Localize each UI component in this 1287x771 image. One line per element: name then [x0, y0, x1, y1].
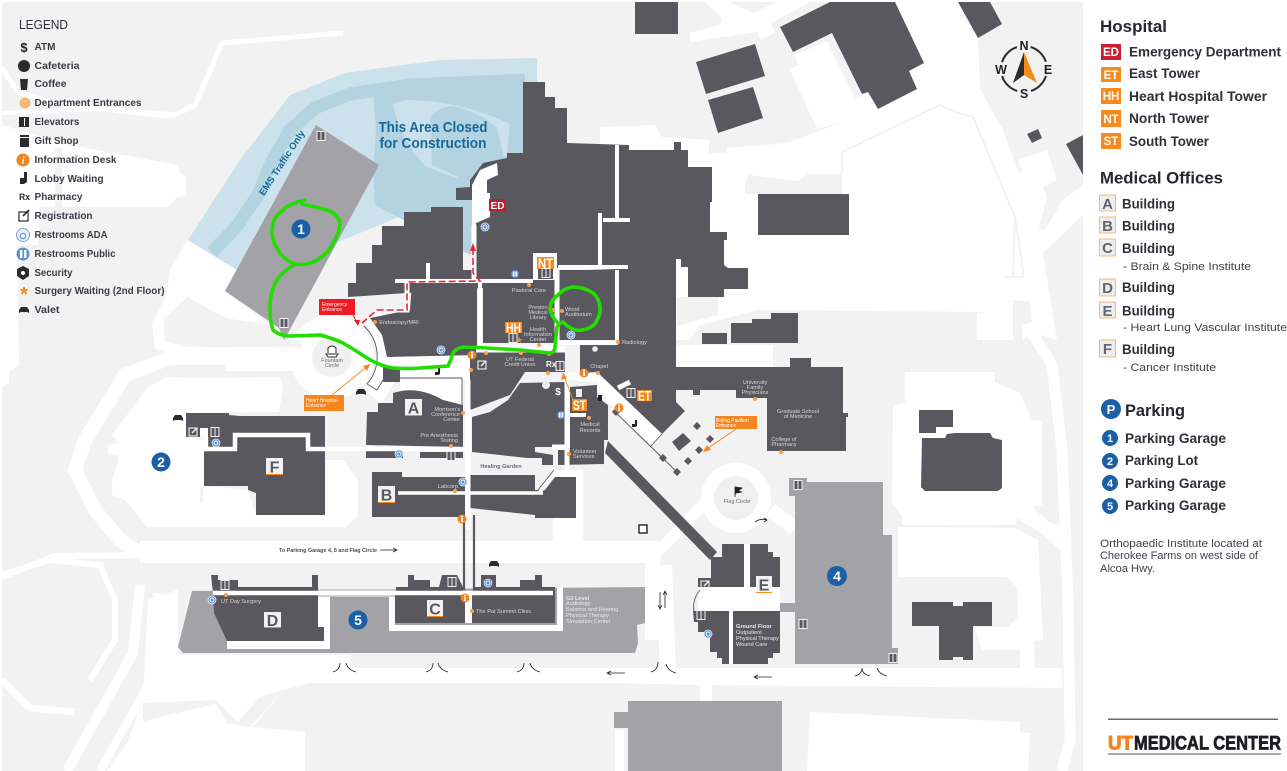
- ground floor note: Outpatient: [736, 630, 762, 636]
- garage 4: [780, 478, 898, 664]
- key: building f: [1100, 340, 1216, 374]
- entrance arrows: [332, 315, 736, 452]
- building letters: B: [381, 488, 392, 504]
- flag circle: Flag Circle: [724, 499, 750, 505]
- legend: elevators: Elevators: [34, 117, 80, 128]
- legend: atm: $: [20, 40, 28, 55]
- ground floor note: Physical Therapy: [736, 636, 779, 642]
- key: parking 4: Parking Garage: [1125, 476, 1226, 491]
- number markers: 1: [297, 221, 305, 237]
- key: building a: [1100, 195, 1175, 213]
- key: building e: [1100, 302, 1287, 334]
- middle block: [483, 283, 557, 343]
- key: building e: - Heart Lung Vascular Institute: [1123, 322, 1287, 334]
- key: heart hospital tower: Heart Hospital Tower: [1129, 89, 1268, 104]
- white bands around decks: [227, 587, 560, 643]
- building B: [372, 472, 465, 517]
- key: north tower: NT: [1103, 114, 1119, 126]
- entrance tags: Entrance: [322, 307, 342, 313]
- rx: Rx: [546, 360, 557, 369]
- registration: [189, 361, 709, 589]
- entrance tags: [304, 299, 757, 429]
- key: building e: E: [1102, 303, 1113, 320]
- compass: W: [995, 63, 1007, 77]
- legend title: LEGEND: [19, 18, 68, 32]
- key: building d: Building: [1122, 280, 1175, 295]
- ground floor note: [736, 624, 779, 648]
- tower badges: ST: [573, 398, 587, 413]
- legend: restrooms ada: Restrooms ADA: [34, 230, 108, 241]
- parking heading: P: [1107, 402, 1116, 417]
- key: parking 1: Parking Garage: [1125, 431, 1226, 446]
- entrance tags: Entrance: [716, 423, 736, 429]
- department entrance dots: [224, 283, 783, 613]
- map labels: Medical: [528, 310, 548, 316]
- key: building c: C: [1102, 240, 1113, 257]
- map labels: Preston: [528, 305, 548, 311]
- key: south tower: [1101, 133, 1210, 149]
- key: building f: F: [1103, 341, 1112, 358]
- tower badges: [489, 199, 652, 413]
- legend: coffee: [20, 79, 67, 90]
- building F: [186, 413, 325, 515]
- map labels: Records: [580, 428, 601, 434]
- key: east tower: [1101, 66, 1201, 82]
- visitor route in green: [270, 200, 600, 368]
- key: east tower: ET: [1104, 70, 1118, 82]
- legend: surgery waiting: Surgery Waiting (2nd Floor): [34, 286, 164, 297]
- heading: area closed: [378, 119, 488, 152]
- atm: $: [555, 387, 561, 398]
- map labels: Healing Garden: [480, 464, 522, 470]
- legend: information desk: [16, 154, 117, 167]
- emergency route: [362, 243, 480, 323]
- map labels: Library: [529, 315, 547, 321]
- building C: [396, 575, 463, 595]
- tower badges: HH: [506, 320, 521, 336]
- grey patches over open ground: [55, 105, 1023, 727]
- number markers: [152, 220, 847, 630]
- key: north tower: North Tower: [1129, 111, 1210, 126]
- key: building a: A: [1102, 196, 1113, 213]
- orthopaedic note: Orthopaedic Institute located at: [1100, 538, 1262, 550]
- key: building d: [1100, 279, 1175, 297]
- key: parking 2: Parking Lot: [1125, 453, 1198, 468]
- map labels: Pre Anesthesia: [420, 433, 459, 439]
- ems label: EMS Traffic Only: [257, 128, 308, 198]
- orthopaedic note: Cherokee Farms on west side of: [1100, 550, 1259, 562]
- key: building b: Building: [1122, 218, 1175, 234]
- number markers: 2: [157, 454, 165, 470]
- flag circle: [714, 476, 758, 520]
- map labels: Credit Union: [504, 362, 536, 368]
- key: building f: - Cancer Institute: [1123, 362, 1216, 374]
- g2 level note: Audiology: [566, 601, 591, 607]
- legend: gift shop: Gift Shop: [34, 136, 78, 147]
- key: building f: Building: [1122, 342, 1175, 357]
- elevators: [210, 131, 898, 663]
- map labels: University: [743, 380, 767, 386]
- ground floor note: Wound Care: [736, 642, 767, 648]
- key: building a: Building: [1122, 196, 1175, 212]
- building E: [698, 544, 744, 590]
- building letters: C: [429, 602, 441, 618]
- direction to parking: To Parking Garage 4, 5 and Flag Circle: [279, 548, 377, 554]
- cafeteria: [542, 381, 550, 389]
- map labels: The Pat Summit Clinic: [476, 609, 532, 615]
- credit union wedge: [470, 352, 565, 410]
- legend: registration: Registration: [34, 211, 92, 222]
- parking heading: Parking: [1125, 402, 1185, 420]
- map labels: Volunteer: [573, 449, 597, 455]
- key: parking 5: Parking Garage: [1125, 498, 1226, 513]
- legend: security: Security: [34, 268, 73, 279]
- coffee: [598, 395, 602, 401]
- map labels: Health: [530, 327, 546, 333]
- parking heading: [1101, 399, 1185, 420]
- legend: cafeteria: Cafeteria: [34, 61, 80, 72]
- medical offices heading: Medical Offices: [1100, 170, 1223, 188]
- building D: [211, 575, 324, 641]
- map labels: UT Day Surgery: [221, 599, 261, 605]
- map labels: Chapel: [590, 364, 608, 370]
- building A: [366, 390, 463, 447]
- g2 level note: Simulation Center: [566, 619, 611, 625]
- key: emergency department: ED: [1103, 47, 1119, 59]
- building letters: F: [270, 460, 280, 476]
- tower badges: ED: [491, 201, 504, 212]
- g2 level note: G2 Level: [566, 596, 590, 602]
- hospital heading: Hospital: [1100, 18, 1167, 36]
- auditorium block: [558, 270, 615, 340]
- entrance tags: Emergency: [322, 302, 348, 308]
- building letters: E: [759, 578, 770, 594]
- key: parking 2: 2: [1107, 456, 1113, 468]
- map labels: UT Federal: [506, 357, 534, 363]
- legend: information desk: i: [22, 156, 25, 167]
- logo: UT: [1108, 734, 1133, 754]
- building letters: [264, 399, 772, 630]
- key: building d: D: [1102, 280, 1113, 297]
- building letters: D: [267, 613, 278, 630]
- legend: pharmacy: Rx: [19, 192, 31, 203]
- compass: S: [1020, 87, 1028, 101]
- key: south tower: ST: [1104, 136, 1118, 148]
- map labels: of Medicine: [784, 414, 812, 420]
- compass: [995, 39, 1052, 101]
- g2 level note: Physical Therapy: [566, 613, 609, 619]
- ground floor note: Ground Floor: [736, 624, 773, 630]
- key: parking 1: 1: [1107, 433, 1113, 445]
- parking key: [1101, 399, 1226, 514]
- legend: cafeteria: [18, 60, 80, 72]
- diagonal corridor: [605, 441, 717, 560]
- g2 level note: [566, 596, 618, 625]
- fountain circle: [312, 337, 352, 377]
- main hospital upper complex: [348, 82, 848, 451]
- ada restrooms: [208, 223, 712, 638]
- fountain circle: Circle: [325, 363, 339, 369]
- key: emergency department: Emergency Department: [1129, 44, 1281, 60]
- southern garage: [614, 701, 782, 771]
- bus: [639, 525, 647, 533]
- map labels: Services: [573, 454, 595, 460]
- hospital key: [1100, 18, 1281, 149]
- heading: area closed: for Construction: [380, 135, 486, 152]
- plaza diamonds: [612, 408, 714, 476]
- key: building c: Building: [1122, 241, 1175, 256]
- map labels: Radiology: [622, 340, 647, 346]
- legend: valet: [19, 305, 60, 316]
- traffic arrows: [333, 518, 887, 679]
- legend: gift shop: [20, 135, 78, 147]
- surgery waiting star: ★: [515, 335, 523, 345]
- legend: atm: [20, 40, 56, 55]
- key: north tower: [1101, 110, 1210, 127]
- fountain circle: Fountain: [321, 358, 343, 364]
- legend: atm: ATM: [34, 42, 56, 53]
- valet: [173, 389, 499, 567]
- detached buildings: [702, 333, 727, 344]
- key: heart hospital tower: HH: [1103, 91, 1119, 103]
- legend: department entrances: Department Entrances: [34, 98, 142, 109]
- key: parking 5: 5: [1107, 501, 1113, 513]
- legend: surgery waiting: *: [20, 284, 28, 306]
- g2 level note: Balance and Hearing: [566, 607, 618, 613]
- legend: lobby waiting: Lobby Waiting: [34, 174, 104, 185]
- legend: lobby waiting: [20, 172, 104, 185]
- map labels: Conference: [431, 412, 460, 418]
- tower badges: NT: [538, 256, 554, 271]
- map labels: Endoscopy/MRI: [379, 320, 419, 326]
- small shape: [383, 367, 400, 382]
- legend: restrooms public: Restrooms Public: [34, 249, 116, 260]
- south block: [472, 382, 565, 465]
- map labels: Center: [530, 337, 547, 343]
- south tower: [558, 385, 608, 465]
- map labels: Physicians: [742, 390, 769, 396]
- thin outlines: [364, 326, 700, 611]
- map labels: Morrison's: [434, 407, 460, 413]
- legend: surgery waiting: [20, 284, 164, 306]
- legend: restrooms public: [16, 248, 116, 260]
- heading: area closed: This Area Closed: [378, 119, 488, 136]
- map labels: Pharmacy: [771, 442, 797, 448]
- map labels: Center: [443, 417, 460, 423]
- lobby waiting: [435, 368, 637, 427]
- key: building c: - Brain & Spine Institute: [1123, 261, 1251, 273]
- medical offices key: [1100, 170, 1287, 374]
- key: parking 4: 4: [1107, 478, 1114, 490]
- construction area: [188, 58, 537, 270]
- security: [592, 346, 598, 352]
- entrance tags: Boling Pavilion: [716, 418, 749, 424]
- map labels: Labcorp: [438, 484, 458, 490]
- entrance tags: Heart Hospital: [306, 398, 338, 404]
- legend: security: [17, 266, 73, 280]
- map labels: Family: [747, 385, 763, 391]
- key: building b: B: [1102, 218, 1113, 235]
- legend: pharmacy: Pharmacy: [34, 192, 83, 203]
- compass: E: [1044, 63, 1052, 77]
- tower badges: ET: [638, 388, 652, 404]
- orthopaedic note: [1100, 538, 1262, 575]
- buildings: [186, 2, 1083, 664]
- map labels: Wood: [565, 307, 580, 313]
- key: south tower: South Tower: [1129, 134, 1210, 149]
- number markers: 4: [833, 568, 841, 584]
- building letters: A: [408, 400, 420, 418]
- garage 5: [178, 587, 645, 653]
- map labels: [221, 288, 819, 615]
- parking garage decks: [178, 125, 898, 771]
- entrance tags: Entrance: [306, 403, 326, 409]
- legend: coffee: Coffee: [34, 79, 67, 90]
- key: building c: [1100, 239, 1251, 273]
- key: east tower: East Tower: [1129, 66, 1201, 81]
- legend: information desk: Information Desk: [34, 155, 117, 166]
- number markers: 5: [354, 612, 362, 628]
- interior corridors: [200, 145, 780, 664]
- map labels: Graduate School: [777, 409, 819, 415]
- map labels: Pastoral Care: [512, 288, 546, 294]
- gift shop: [576, 389, 582, 397]
- legend: restrooms ada: [16, 228, 108, 242]
- legend panel: [16, 18, 164, 316]
- endoscopy block: [370, 283, 477, 357]
- compass: N: [1019, 39, 1029, 53]
- map labels: Medical: [580, 422, 600, 428]
- legend: valet: Valet: [34, 305, 60, 316]
- orthopaedic note: Alcoa Hwy.: [1100, 563, 1155, 575]
- key: building e: Building: [1122, 304, 1175, 318]
- map labels: Information: [524, 332, 552, 338]
- public restrooms: [511, 270, 565, 419]
- information desks: [458, 350, 624, 602]
- logo: [1108, 718, 1281, 754]
- map labels: College of: [771, 437, 797, 443]
- map icons: [173, 131, 898, 663]
- garage 1: [225, 125, 379, 340]
- key: building b: [1100, 217, 1175, 235]
- map labels: Auditorium: [565, 312, 592, 318]
- map labels: Testing: [440, 438, 458, 444]
